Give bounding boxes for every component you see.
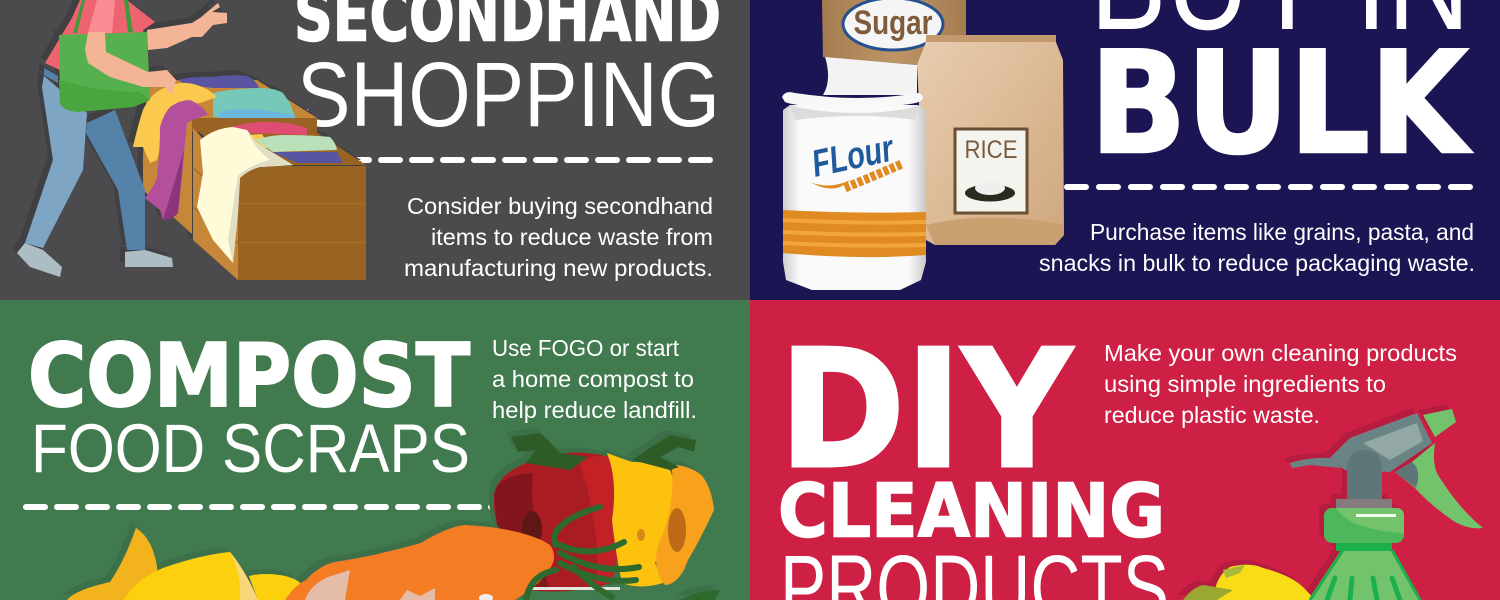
text block: Consider buying secondhand [407, 193, 713, 219]
magenta garment [145, 100, 208, 220]
icon: flour bag [782, 92, 926, 290]
divider [26, 504, 510, 510]
icon: flour bag: FLour [808, 127, 899, 186]
spray head [1330, 413, 1432, 472]
heading: compost food scraps [28, 325, 470, 487]
shelf line [505, 587, 620, 590]
trigger [1395, 443, 1483, 528]
text block [1104, 340, 1457, 428]
text block [1039, 219, 1475, 276]
back bin [143, 80, 317, 234]
shoes [17, 243, 62, 277]
text block: using simple ingredients to [1104, 371, 1386, 397]
heading: diy cleaning products: DIY [779, 316, 1074, 505]
heading: buy in bulk: BULK [1090, 22, 1472, 186]
illustration: spray bottle and lemon [1183, 409, 1483, 600]
leaf [680, 590, 720, 600]
text block [492, 335, 697, 423]
text block: Make your own cleaning products [1104, 340, 1457, 366]
divider [350, 157, 710, 163]
panel: buy in bulk [750, 0, 1500, 300]
icon: sugar bag [822, 0, 966, 95]
front bin clothes [230, 122, 307, 135]
text block: Purchase items like grains, pasta, and [1090, 219, 1474, 245]
text block [404, 193, 713, 281]
bag [59, 32, 150, 112]
illustration: food scraps [67, 433, 720, 600]
right leg [86, 110, 145, 250]
heading: diy cleaning products [778, 316, 1169, 600]
icon: rice bag [917, 35, 1064, 245]
bag straps [73, 0, 133, 33]
bottle cap [1324, 508, 1404, 543]
illustration: shopper at clothes bins [17, 0, 366, 280]
neck [1347, 450, 1382, 499]
heading: diy cleaning products: CLEANING [778, 468, 1165, 554]
text block: snacks in bulk to reduce packaging waste. [1039, 250, 1475, 276]
lemon [1190, 565, 1315, 600]
text block: help reduce landfill. [492, 397, 697, 423]
divider [1067, 184, 1470, 190]
text block: items to reduce waste from [431, 224, 713, 250]
cream garment [197, 127, 293, 263]
shirt [45, 0, 155, 70]
front bin face [238, 166, 366, 280]
lemon peels [67, 528, 158, 600]
heading: compost food scraps: FOOD SCRAPS [31, 410, 470, 487]
green tip [1423, 409, 1456, 437]
text block: Use FOGO or start [492, 335, 679, 361]
panel: compost food scraps [0, 300, 750, 600]
reaching arm [85, 32, 176, 95]
front bin side [193, 128, 238, 280]
icon: sugar bag: Sugar [854, 4, 932, 42]
front bin rim [199, 128, 366, 165]
upper arm and hand [147, 3, 227, 50]
bottle body [1310, 550, 1420, 600]
panel: secondhand shopping [0, 0, 750, 300]
left leg [25, 76, 87, 248]
heading: compost food scraps: COMPOST [28, 325, 470, 427]
panel: diy cleaning products [750, 300, 1500, 600]
text block: reduce plastic waste. [1104, 402, 1320, 428]
yellow garment [133, 83, 217, 163]
peppers [494, 452, 620, 591]
nozzle tube [1290, 458, 1342, 468]
heading: secondhand shopping [294, 0, 721, 146]
icon: rice bag: RICE [964, 136, 1018, 164]
eggshell [305, 570, 350, 600]
text block: manufacturing new products. [404, 255, 713, 281]
pepper stems [511, 433, 588, 470]
text block: a home compost to [492, 366, 694, 392]
carrot [285, 525, 554, 600]
back bin clothes [178, 75, 259, 88]
collar [1336, 499, 1392, 508]
heading: secondhand shopping: SHOPPING [297, 44, 720, 146]
carrot greens [526, 507, 639, 600]
